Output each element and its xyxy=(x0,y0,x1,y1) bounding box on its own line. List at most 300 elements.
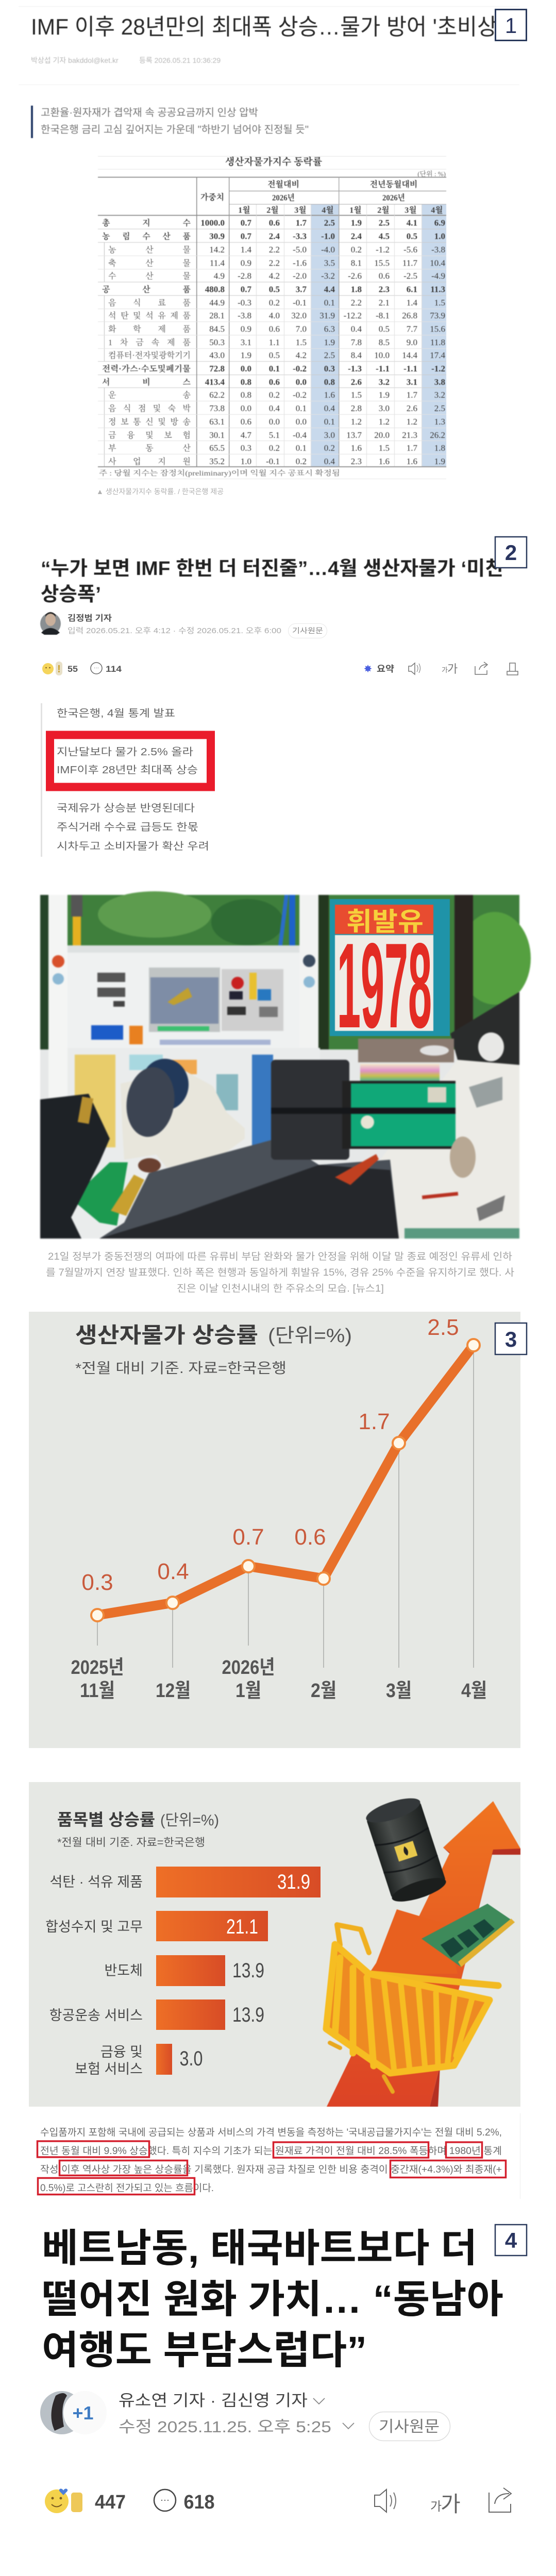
table values: 0.6 xyxy=(379,271,390,281)
table values: 0.1 xyxy=(269,364,280,374)
table values: 0.7 xyxy=(241,231,251,241)
table values: 2.6 xyxy=(351,377,362,387)
table values: 6.9 xyxy=(434,218,445,228)
table values: -1.2 xyxy=(376,245,390,255)
table values: 50.3 xyxy=(209,337,225,347)
table values: -0.3 xyxy=(238,298,251,308)
article 4 headline: 여행도 부담스럽다” xyxy=(42,2329,367,2372)
table row labels: 서비스 xyxy=(102,377,191,387)
article 3 body text with highlights: 0.5%)로 고스란히 전가되고 있는 흐름이다. xyxy=(40,2182,214,2194)
table row labels: 화학제품 xyxy=(108,324,191,334)
table values: 14.4 xyxy=(402,350,417,360)
table values: 3.2 xyxy=(379,377,390,387)
article 1 summary: 고환율·원자재가 겹악재 속 공공요금까지 인상 압박 xyxy=(41,107,258,118)
table values: 32.0 xyxy=(291,311,307,320)
table header: 가중치 xyxy=(200,192,224,202)
item labels: 보험 서비스 xyxy=(75,2061,143,2077)
chart values: 0.6 xyxy=(294,1524,326,1550)
table header: 2026년 xyxy=(272,193,295,202)
table values: 0.2 xyxy=(324,443,335,453)
article 1 title: IMF 이후 28년만의 최대폭 상승…물가 방어 '초비상 xyxy=(31,14,497,40)
red highlight box xyxy=(50,735,211,787)
chart x axis labels: 2026년 xyxy=(222,1657,275,1679)
table row labels: 수산물 xyxy=(108,271,191,281)
table header: 전월대비 xyxy=(267,179,299,189)
table values: -5.0 xyxy=(293,245,307,255)
table values: 30.1 xyxy=(209,430,225,440)
table values: 13.7 xyxy=(346,430,362,440)
table values: 3.0 xyxy=(379,403,390,413)
chart x axis labels: 1월 xyxy=(235,1680,261,1702)
reaction counts xyxy=(42,662,122,675)
lower pump xyxy=(68,1048,320,1239)
table values: 0.6 xyxy=(241,417,251,427)
number badge 1 xyxy=(496,9,527,40)
table values: -5.6 xyxy=(403,245,417,255)
table values: 43.0 xyxy=(209,350,225,360)
table values: 9.0 xyxy=(407,337,417,347)
reaction counts 2: 618 xyxy=(183,2492,214,2513)
table values: 35.2 xyxy=(209,456,225,466)
chart values: 0.3 xyxy=(81,1570,113,1595)
table values: 1.5 xyxy=(379,443,390,453)
reporter avatars +1 xyxy=(40,2391,107,2434)
table values: 1.5 xyxy=(296,337,307,347)
fuel pump body xyxy=(68,945,299,1048)
item labels: 반도체 xyxy=(104,1963,143,1978)
photo: gas station xyxy=(40,891,531,1239)
reporter byline: 기사원문 xyxy=(292,626,323,635)
illustration: memory chip xyxy=(422,1904,515,1967)
table values: 14.2 xyxy=(209,245,225,255)
chart x axis labels: 11월 xyxy=(80,1680,115,1702)
table values: 3.7 xyxy=(296,284,307,294)
chart values: 0.4 xyxy=(157,1559,189,1584)
table values: 11.8 xyxy=(430,337,445,347)
article 2 summary: 지난달보다 물가 2.5% 올라 xyxy=(57,746,193,758)
number badge 1: 1 xyxy=(505,13,517,38)
article 4 headline xyxy=(42,2227,503,2372)
table row labels: 공산품 xyxy=(102,284,191,294)
table header: 2026년 xyxy=(382,193,405,202)
table row labels: 운송 xyxy=(108,391,191,400)
table row labels: 음식료품 xyxy=(108,298,191,308)
table header: 2월 xyxy=(377,205,390,215)
table values: 1.9 xyxy=(379,390,390,400)
reaction counts: ··· xyxy=(94,665,99,671)
rider xyxy=(121,1071,245,1167)
table values: 1000.0 xyxy=(200,218,225,228)
table header: 1월 xyxy=(349,205,362,215)
table values: -1.2 xyxy=(431,364,445,374)
table values: 1.2 xyxy=(379,417,390,427)
table values: 1.9 xyxy=(241,350,251,360)
article 1 summary: 한국은행 금리 고심 깊어지는 가운데 "하반기 넘어야 진정될 듯" xyxy=(41,124,309,135)
table values: 0.5 xyxy=(269,284,280,294)
table values: 6.3 xyxy=(324,324,335,334)
table values: -4.9 xyxy=(431,271,445,281)
table values: -2.6 xyxy=(348,271,362,281)
table values: 1.7 xyxy=(407,443,417,453)
table row labels: 석탄및석유제품 xyxy=(108,311,191,320)
reporters and date: 수정 2025.11.25. 오후 5:25 xyxy=(119,2418,331,2436)
article toolbar icons 2: 가 xyxy=(441,2492,461,2516)
table values: 2.2 xyxy=(269,258,280,268)
table values: 3.8 xyxy=(434,377,445,387)
table values: 15.5 xyxy=(374,258,390,268)
table values: 3.5 xyxy=(324,258,335,268)
table values: 2.8 xyxy=(351,403,362,413)
table values: 3.2 xyxy=(434,390,445,400)
number badge 3: 3 xyxy=(505,1327,517,1351)
article 1 header xyxy=(19,6,519,85)
table values: 0.2 xyxy=(269,298,280,308)
photo caption: 진은 이날 인천시내의 한 주유소의 모습. [뉴스1] xyxy=(177,1283,384,1294)
article 3 body text with highlights xyxy=(37,2113,520,2199)
item values: 21.1 xyxy=(226,1916,258,1938)
motorcycle xyxy=(40,1094,110,1239)
table values: 4.0 xyxy=(269,311,280,320)
table values: 2.5 xyxy=(324,350,335,360)
table values: 63.1 xyxy=(209,417,225,427)
article toolbar icons 2: 가 xyxy=(430,2500,442,2514)
table caption: ▲ 생산자물가지수 동락률. / 한국은행 제공 xyxy=(96,487,224,496)
table values: 0.0 xyxy=(241,403,251,413)
table title: 생산자물가지수 동락률 xyxy=(225,156,323,167)
table row labels: 전력·가스·수도및폐기물 xyxy=(102,364,191,374)
reporters and date: 유소연 기자 · 김신영 기자 xyxy=(119,2392,308,2410)
table values: -8.1 xyxy=(376,311,390,320)
table values: 0.5 xyxy=(269,350,280,360)
table values: 21.3 xyxy=(402,430,417,440)
table values: 0.9 xyxy=(241,324,251,334)
table values: 65.5 xyxy=(209,443,225,453)
article 3 body text with highlights: 수입품까지 포함해 국내에 공급되는 상품과 서비스의 가격 변동을 측정하는 '국내공급물가지수'는 전월 대비 5.2%, xyxy=(40,2127,502,2138)
table values: 2.5 xyxy=(379,218,390,228)
chart heading xyxy=(75,1323,352,1376)
table values: 8.1 xyxy=(351,258,362,268)
table values: -1.3 xyxy=(348,364,362,374)
reporters and date: 기사원문 xyxy=(379,2418,440,2435)
reaction counts 2: 447 xyxy=(95,2492,126,2513)
table values: 4.2 xyxy=(296,350,307,360)
illustration: shopping basket xyxy=(326,1925,498,2092)
article toolbar icons: 가 xyxy=(447,663,458,675)
table values: 1.9 xyxy=(324,337,335,347)
article 2 title: “누가 보면 IMF 한번 더 터진줄”…4월 생산자물가 ‘미친 xyxy=(41,558,503,580)
table values: 2.4 xyxy=(269,231,280,241)
table values: 5.1 xyxy=(269,430,280,440)
table values: 7.0 xyxy=(296,324,307,334)
table values: 8.4 xyxy=(351,350,362,360)
table values: 0.4 xyxy=(351,324,362,334)
reaction counts 2: ··· xyxy=(160,2495,170,2505)
table values: -3.8 xyxy=(431,245,445,255)
table values: -3.2 xyxy=(321,271,335,281)
number badge 4: 4 xyxy=(505,2228,517,2252)
table header: 4월 xyxy=(322,205,334,215)
item labels: 합성수지 및 고무 xyxy=(45,1919,143,1935)
table values: -0.1 xyxy=(266,456,280,466)
reporter avatar xyxy=(40,612,61,635)
table values: 26.8 xyxy=(402,311,417,320)
table values: 11.3 xyxy=(430,284,445,294)
table values: 0.0 xyxy=(241,364,251,374)
table values: 0.8 xyxy=(241,390,251,400)
table values: -3.8 xyxy=(238,311,251,320)
reaction counts: 55 xyxy=(68,664,78,674)
table values: 4.9 xyxy=(214,271,225,281)
table values: 28.1 xyxy=(209,311,225,320)
table values: 2.4 xyxy=(351,231,362,241)
item values xyxy=(179,1871,310,2070)
chart values: 0.7 xyxy=(232,1524,264,1550)
reaction counts: 114 xyxy=(106,664,122,674)
number badge 2: 2 xyxy=(505,540,517,565)
table values: 2.2 xyxy=(351,298,362,308)
chart drop lines xyxy=(97,1345,474,1668)
item chart heading: (단위=%) xyxy=(160,1812,219,1829)
table values: 1.0 xyxy=(241,456,251,466)
table header: 전년동월대비 xyxy=(370,179,417,189)
table row labels: 정보통신및방송 xyxy=(108,417,191,427)
car xyxy=(376,991,519,1239)
table values: 2.6 xyxy=(407,403,417,413)
chart x axis labels: 3월 xyxy=(386,1680,412,1702)
table header: 4월 xyxy=(431,205,443,215)
table values: 17.4 xyxy=(430,350,445,360)
table values: 1.2 xyxy=(351,417,362,427)
table values: -2.0 xyxy=(293,271,307,281)
photo caption: 21일 정부가 중동전쟁의 여파에 따른 유류비 부담 완화와 물가 안정을 위해 이달 말 종료 예정인 유류세 인하 xyxy=(48,1251,512,1262)
article 2 summary: 시차두고 소비자물가 확산 우려 xyxy=(57,840,209,852)
item labels: 항공운송 서비스 xyxy=(49,2008,143,2023)
table values: 73.9 xyxy=(430,311,445,320)
table values: 30.9 xyxy=(209,231,225,241)
reporter byline: 김정범 기자 xyxy=(68,614,112,623)
table values: 1.6 xyxy=(407,456,417,466)
table values: 10.0 xyxy=(374,350,390,360)
table values: 1.3 xyxy=(434,417,445,427)
table values: -0.4 xyxy=(293,430,307,440)
table values: 0.8 xyxy=(324,377,335,387)
table header: 2월 xyxy=(266,205,279,215)
table values: 0.3 xyxy=(324,364,335,374)
table values: 0.5 xyxy=(379,324,390,334)
table values: 413.4 xyxy=(205,377,225,387)
table values: 0.6 xyxy=(269,377,280,387)
number badge 3 xyxy=(495,1323,527,1354)
table values: -4.0 xyxy=(321,245,335,255)
table values: -0.1 xyxy=(293,298,307,308)
item values: 13.9 xyxy=(232,2004,264,2026)
item labels: 석탄 · 석유 제품 xyxy=(49,1874,143,1890)
photo caption xyxy=(46,1251,514,1294)
reaction counts: ! xyxy=(57,664,61,675)
table row labels: 농림수산품 xyxy=(102,231,191,241)
table values: 0.6 xyxy=(269,324,280,334)
gasoline price sign xyxy=(330,899,450,1053)
article 3 body text with highlights: 작성 이후 역사상 가장 높은 상승률을 기록했다. 원자재 공급 차질로 인한 비용 충격이 중간재(+4.3%)와 최종재(+ xyxy=(40,2164,502,2175)
table row labels: 1차금속제품 xyxy=(108,337,191,347)
chart x axis labels: 12월 xyxy=(156,1680,191,1702)
table row labels: 축산물 xyxy=(108,258,191,268)
item chart heading: 품목별 상승률 xyxy=(57,1810,155,1829)
table values: 1.6 xyxy=(324,390,335,400)
table values: 44.9 xyxy=(209,298,225,308)
article toolbar icons: ✸ xyxy=(364,664,372,675)
article toolbar icons: 요약 xyxy=(377,664,394,674)
table values: -2.5 xyxy=(403,271,417,281)
table values: 0.7 xyxy=(241,284,251,294)
panel: price rise by item xyxy=(29,1782,520,2107)
illustration: oil barrel xyxy=(363,1793,448,1906)
table header: 1월 xyxy=(238,205,250,215)
table values: 1.1 xyxy=(269,337,280,347)
table row labels: 사업지원 xyxy=(108,456,191,466)
item chart heading: *전월 대비 기준. 자료=한국은행 xyxy=(57,1837,205,1849)
table values: 2.3 xyxy=(379,284,390,294)
table values: 3.1 xyxy=(241,337,251,347)
table header: 3월 xyxy=(294,205,307,215)
reaction counts 2 xyxy=(45,2488,214,2513)
article toolbar icons xyxy=(364,662,518,675)
table values: 4.2 xyxy=(269,271,280,281)
table values: -12.2 xyxy=(344,311,362,320)
table values: 20.0 xyxy=(374,430,390,440)
chart heading: (단위=%) xyxy=(268,1325,352,1347)
table values: 2.3 xyxy=(351,456,362,466)
table values: 0.8 xyxy=(241,377,251,387)
table values: 2.5 xyxy=(434,403,445,413)
table values: 31.9 xyxy=(319,311,335,320)
table values: 1.4 xyxy=(241,245,251,255)
table values: 0.0 xyxy=(269,417,280,427)
article 2 summary: 한국은행, 4월 통계 발표 xyxy=(57,707,175,719)
article toolbar icons: 가 xyxy=(442,666,448,674)
table values xyxy=(200,218,445,466)
table values: 0.1 xyxy=(296,443,307,453)
table header: 3월 xyxy=(405,205,417,215)
number badge 2 xyxy=(495,537,527,568)
table values: 3.0 xyxy=(324,430,335,440)
table values: 11.7 xyxy=(402,258,417,268)
table values: 0.1 xyxy=(296,403,307,413)
reporter avatars +1: +1 xyxy=(72,2402,94,2424)
photo caption: 를 7월말까지 연장 발표했다. 인하 폭은 현행과 동일하게 휘발유 15%, 경유 25% 수준을 유지하기로 했다. 사 xyxy=(46,1267,514,1278)
item values: 13.9 xyxy=(232,1959,264,1982)
chart heading: 생산자물가 상승률 xyxy=(75,1323,258,1347)
table values: 72.8 xyxy=(209,364,225,374)
article 2 title: 상승폭’ xyxy=(41,584,101,605)
table values: 0.4 xyxy=(269,403,280,413)
table values: 1.7 xyxy=(407,390,417,400)
article 4 headline: 떨어진 원화 가치… “동남아 xyxy=(42,2278,503,2321)
article 2 title xyxy=(41,558,503,605)
chart heading: *전월 대비 기준. 자료=한국은행 xyxy=(75,1360,287,1376)
table values: 1.4 xyxy=(407,298,417,308)
article 2 summary: 주식거래 수수료 급등도 한몫 xyxy=(57,821,198,833)
table values: 3.1 xyxy=(407,377,417,387)
table values: 1.8 xyxy=(434,443,445,453)
article 2 summary: IMF이후 28년만 최대폭 상승 xyxy=(57,764,198,776)
item values: 3.0 xyxy=(179,2047,203,2070)
table values: -2.8 xyxy=(238,271,251,281)
chart values: 1.7 xyxy=(358,1409,390,1434)
table row labels: 음식점및숙박 xyxy=(108,403,191,413)
table row labels: 금융및보험 xyxy=(108,430,191,440)
chart values xyxy=(81,1315,459,1595)
table values: 73.8 xyxy=(209,403,225,413)
table values: 1.7 xyxy=(296,218,307,228)
table values: 7.7 xyxy=(407,324,417,334)
table values: 6.1 xyxy=(407,284,417,294)
table values: -1.1 xyxy=(376,364,390,374)
table row labels: 농산물 xyxy=(108,245,191,255)
table values: 0.1 xyxy=(324,417,335,427)
chart x axis labels: 2월 xyxy=(311,1680,336,1702)
table values: 4.7 xyxy=(241,430,251,440)
producer price index table xyxy=(98,156,446,479)
table row labels: 총지수 xyxy=(102,218,191,228)
article toolbar icons 2 xyxy=(375,2488,511,2516)
table values: 0.4 xyxy=(324,456,335,466)
reporter byline: 입력 2026.05.21. 오후 4:12 · 수정 2026.05.21. 오후 6:00 xyxy=(68,626,281,635)
table values: 1.6 xyxy=(351,443,362,453)
table values: 84.5 xyxy=(209,324,225,334)
table values: 1.2 xyxy=(407,417,417,427)
table values: 0.0 xyxy=(296,377,307,387)
reporters and date xyxy=(119,2392,450,2441)
panel: producer price line chart xyxy=(29,1312,520,1748)
table values: 0.9 xyxy=(241,258,251,268)
chart x axis labels xyxy=(71,1657,487,1702)
table header xyxy=(200,179,443,215)
table values: 62.2 xyxy=(209,390,225,400)
article 1 summary xyxy=(31,106,309,138)
article 1 byline: 박상섭 기자 bakddol@ket.kr xyxy=(31,56,119,64)
table values: 4.1 xyxy=(407,218,417,228)
article 3 body text with highlights: 전년 동월 대비 9.9% 상승했다. 특히 지수의 기초가 되는 원재료 가격이 전월 대비 28.5% 폭등하며 1980년 통계 xyxy=(40,2145,502,2157)
table values: 1.5 xyxy=(434,298,445,308)
number badge 4 xyxy=(495,2225,527,2256)
table values: 10.4 xyxy=(430,258,445,268)
table values: 0.2 xyxy=(296,456,307,466)
table values: 1.0 xyxy=(434,231,445,241)
table values: 2.2 xyxy=(269,245,280,255)
table values: 0.6 xyxy=(269,218,280,228)
table values: 0.7 xyxy=(241,218,251,228)
table values: 1.8 xyxy=(351,284,362,294)
item labels xyxy=(45,1874,143,2077)
article 4 headline: 베트남동, 태국바트보다 더 xyxy=(42,2227,477,2270)
chart values: 2.5 xyxy=(427,1315,459,1340)
table values: 1.5 xyxy=(351,390,362,400)
table values: 0.2 xyxy=(269,443,280,453)
chart line xyxy=(97,1345,474,1615)
producer price index table: (단위 : %) xyxy=(417,170,446,178)
table values: 4.4 xyxy=(324,284,335,294)
illustration: red rising arrow xyxy=(327,1801,520,2107)
table values: 0.2 xyxy=(269,390,280,400)
table values: 2.5 xyxy=(324,218,335,228)
table values: 480.8 xyxy=(205,284,225,294)
table values: 1.9 xyxy=(434,456,445,466)
table values: 0.0 xyxy=(296,417,307,427)
table values: 0.5 xyxy=(407,231,417,241)
item chart heading xyxy=(57,1810,219,1849)
table values: -1.0 xyxy=(321,231,335,241)
